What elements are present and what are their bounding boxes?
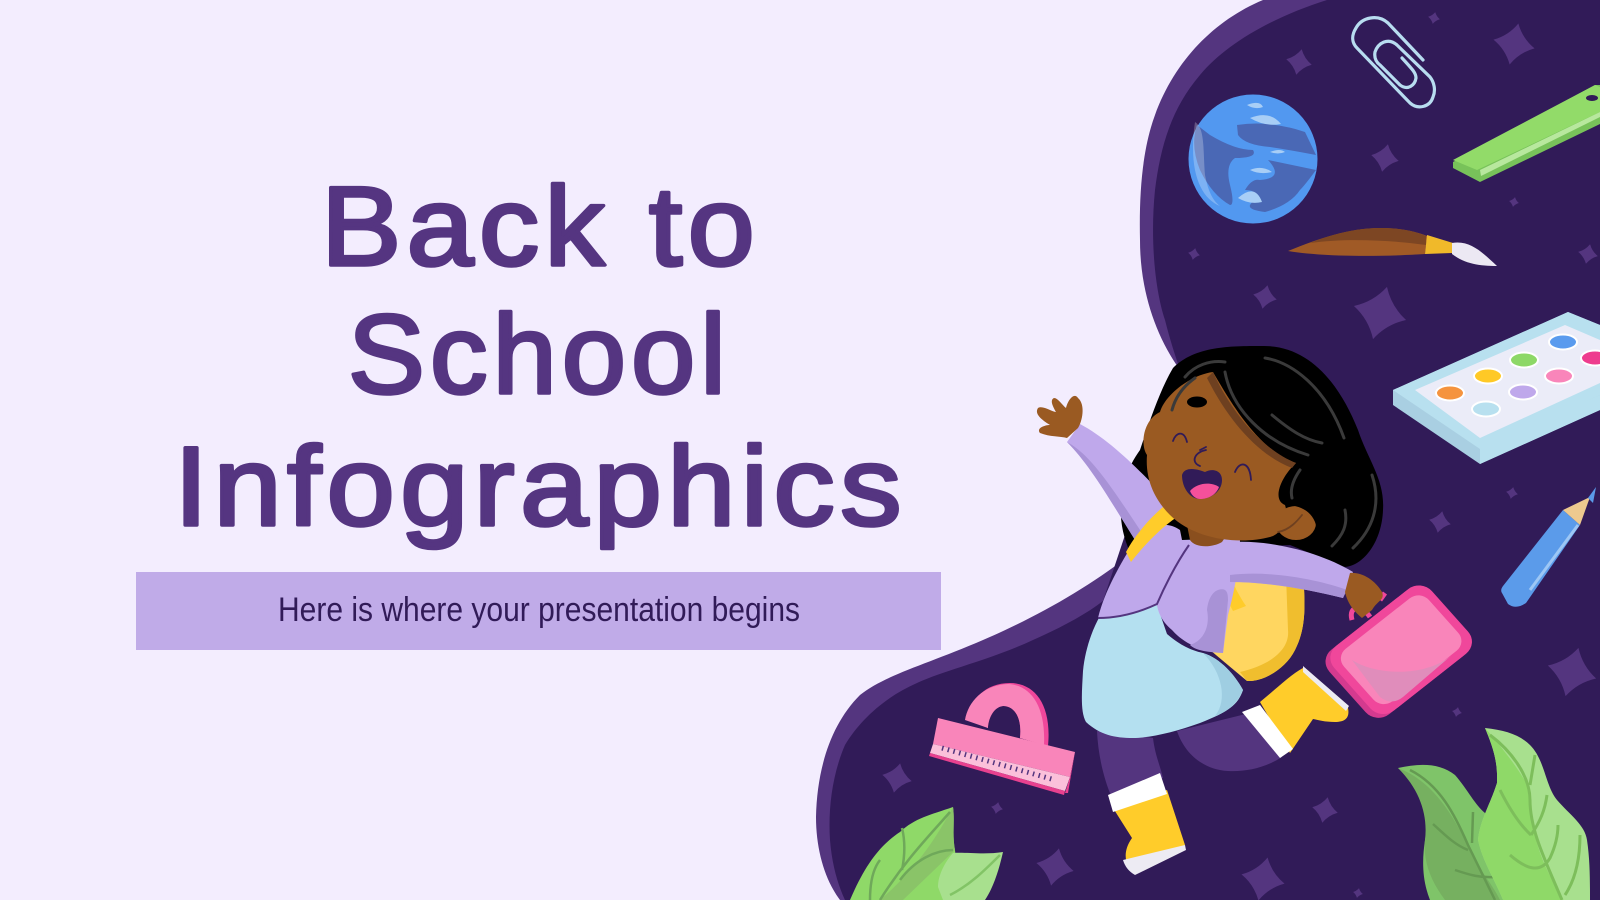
ear	[1276, 506, 1316, 540]
title	[174, 164, 907, 549]
hair lock and highlights	[1172, 358, 1376, 548]
icon: paint tray	[1393, 312, 1600, 464]
blob: outer purple edge	[816, 0, 1600, 900]
backpack	[1210, 535, 1304, 681]
lower hand	[1345, 573, 1383, 618]
dress	[1082, 605, 1243, 738]
title: School	[348, 292, 731, 417]
lunchbox	[1319, 579, 1479, 724]
icon: pencil	[1501, 487, 1596, 607]
title: Back to	[321, 164, 760, 289]
face	[1143, 372, 1296, 541]
decorative stars	[879, 11, 1600, 900]
illustration: girl	[1037, 346, 1479, 875]
raised hand	[1037, 396, 1083, 438]
torso and sleeves	[1067, 424, 1353, 653]
icon: green ruler	[1453, 85, 1600, 182]
subtitle bar	[136, 572, 941, 650]
icon: paperclip	[1353, 18, 1434, 107]
icon: protractor	[929, 683, 1075, 795]
blob: inner dark panel	[830, 0, 1600, 900]
mouth	[1182, 469, 1222, 499]
icon: leaves bottom left	[850, 807, 1003, 900]
icon: leaves bottom right	[1398, 728, 1590, 900]
icon: globe	[1188, 94, 1318, 224]
neck	[1187, 525, 1230, 546]
title: Infographics	[174, 424, 907, 549]
icon: paintbrush	[1288, 228, 1497, 266]
eye and smile details	[1173, 396, 1302, 532]
hair back	[1121, 346, 1383, 567]
subtitle bar: Here is where your presentation begins	[278, 591, 800, 629]
legs and boots	[1097, 666, 1349, 875]
